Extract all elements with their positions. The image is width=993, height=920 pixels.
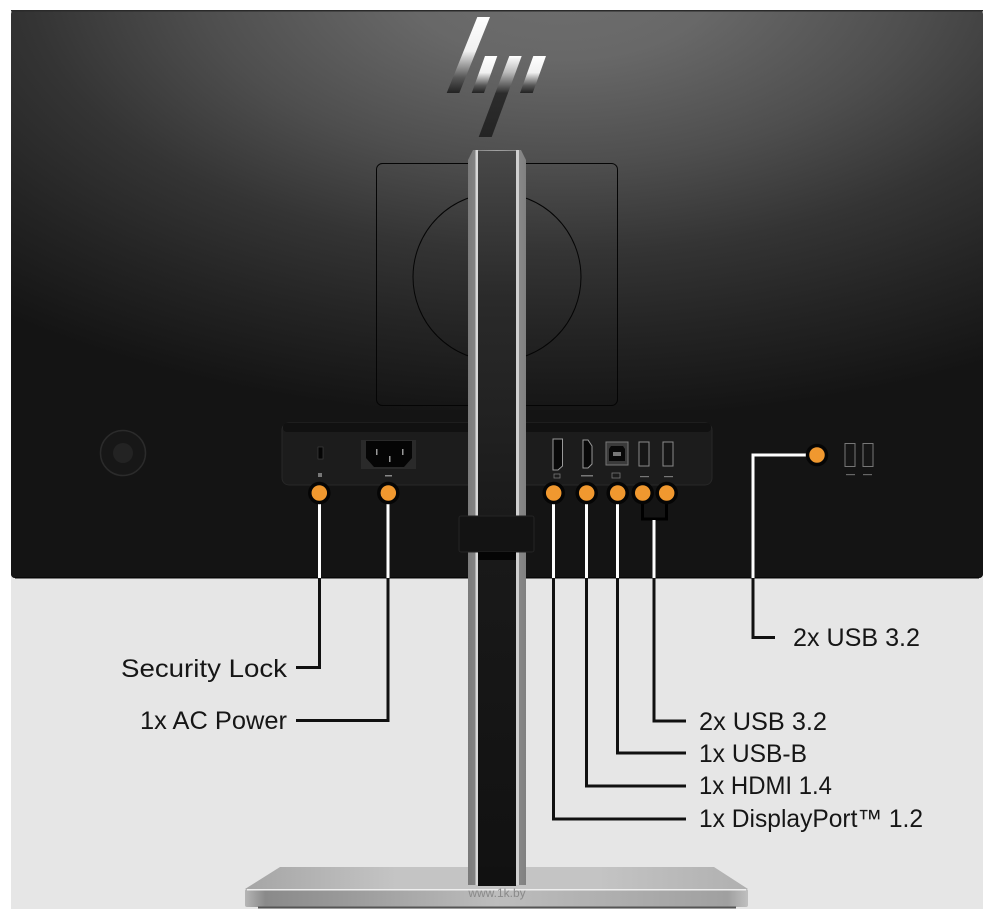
leader: USB-B bbox=[618, 503, 686, 753]
icon: AC socket bbox=[361, 440, 416, 476]
port bar bbox=[282, 423, 712, 485]
label: 1x AC Power: 1x AC Power bbox=[140, 707, 287, 735]
leader: AC power bbox=[296, 503, 388, 720]
icon: HDMI socket bbox=[581, 440, 593, 476]
label: rear 2x USB 3.2: 2x USB 3.2 bbox=[699, 708, 827, 736]
watermark: www.1k.by bbox=[467, 886, 526, 900]
monitor stand neck bbox=[468, 150, 526, 885]
label: 1x DisplayPort 1.2: 1x DisplayPort™ 1.2 bbox=[699, 805, 923, 833]
label: 1x USB-B: 1x USB-B bbox=[699, 740, 807, 768]
label: Security Lock: Security Lock bbox=[121, 655, 288, 683]
icon: USB-B socket bbox=[606, 442, 628, 478]
label: side 2x USB 3.2: 2x USB 3.2 bbox=[793, 624, 920, 652]
VESA mount plate bbox=[376, 164, 618, 406]
stand base bbox=[245, 867, 748, 908]
cable clip bbox=[459, 516, 534, 560]
leader: HDMI bbox=[586, 503, 686, 786]
monitor back panel bbox=[11, 10, 983, 578]
leader: side USB bbox=[753, 455, 808, 638]
lower background panel bbox=[11, 570, 983, 909]
marker dots bbox=[310, 446, 826, 502]
icon: USB socket 1 bbox=[639, 442, 649, 477]
power button bbox=[100, 430, 146, 476]
icon: lock slot bbox=[318, 447, 323, 477]
leader: rear USB bracket bbox=[642, 500, 686, 721]
leader: security lock bbox=[296, 503, 320, 668]
label: 1x HDMI 1.4: 1x HDMI 1.4 bbox=[699, 772, 832, 800]
HP logo bbox=[447, 17, 546, 137]
icon: USB socket 2 bbox=[663, 442, 673, 477]
leader: DisplayPort bbox=[554, 503, 686, 819]
side USB ports bbox=[845, 444, 873, 475]
icon: DisplayPort socket bbox=[553, 439, 562, 478]
